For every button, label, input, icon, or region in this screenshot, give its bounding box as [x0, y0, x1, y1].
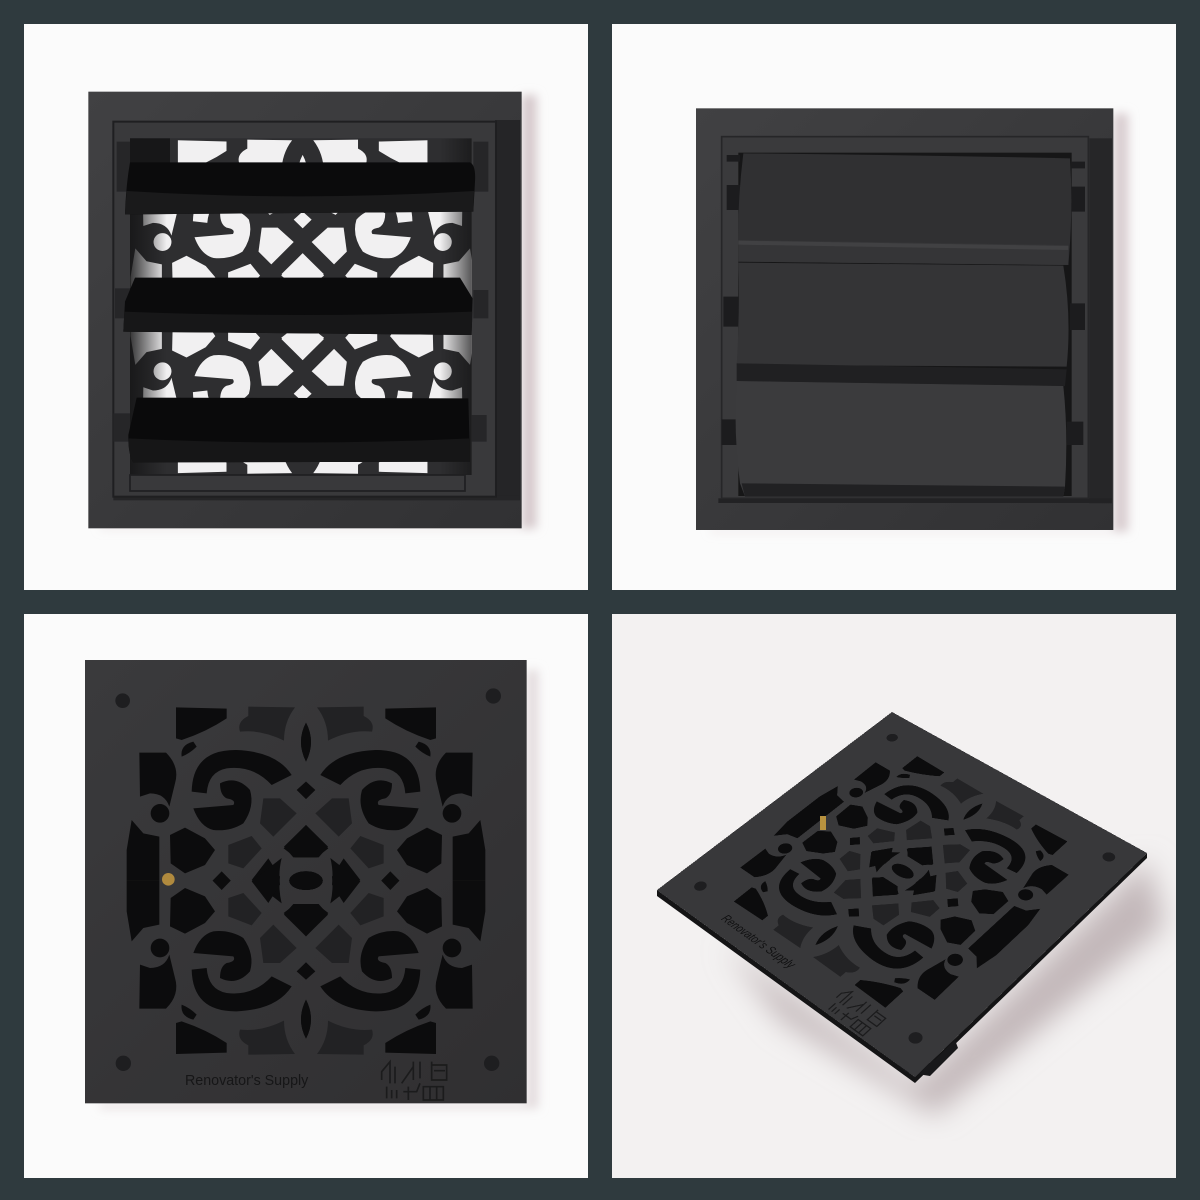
raised inner frame — [113, 122, 496, 497]
panel: open louvers, front view — [24, 24, 588, 590]
back plate — [88, 92, 522, 528]
back plate — [696, 108, 1113, 530]
embossed maker logo — [382, 1062, 447, 1100]
lattice openings — [127, 707, 485, 1055]
raised inner frame — [722, 137, 1088, 498]
side hinge knuckles — [113, 142, 488, 442]
embossed maker name: Renovator's Supply — [185, 1073, 309, 1089]
panel: closed louvers, front view — [612, 24, 1176, 590]
louver top — [125, 162, 475, 214]
louver top panel — [738, 153, 1071, 265]
louvered grille, open — [88, 92, 537, 528]
louvered grille, closed — [696, 108, 1128, 532]
panel: register face, flat view — [24, 614, 588, 1178]
hinge knuckles — [722, 155, 1085, 445]
plate — [85, 660, 527, 1103]
brass stud — [162, 873, 175, 886]
louver middle — [123, 278, 473, 335]
screws — [115, 688, 501, 1071]
panel: register face, angled view — [612, 614, 1176, 1178]
louver bottom panel — [736, 381, 1066, 497]
louver middle panel — [737, 263, 1069, 367]
register face in perspective: Renovator's Supply — [657, 795, 671, 811]
register face — [85, 660, 538, 1108]
louver bottom — [128, 398, 470, 462]
lattice seen through the open louvers — [130, 138, 475, 475]
register face in perspective — [657, 712, 1146, 1077]
